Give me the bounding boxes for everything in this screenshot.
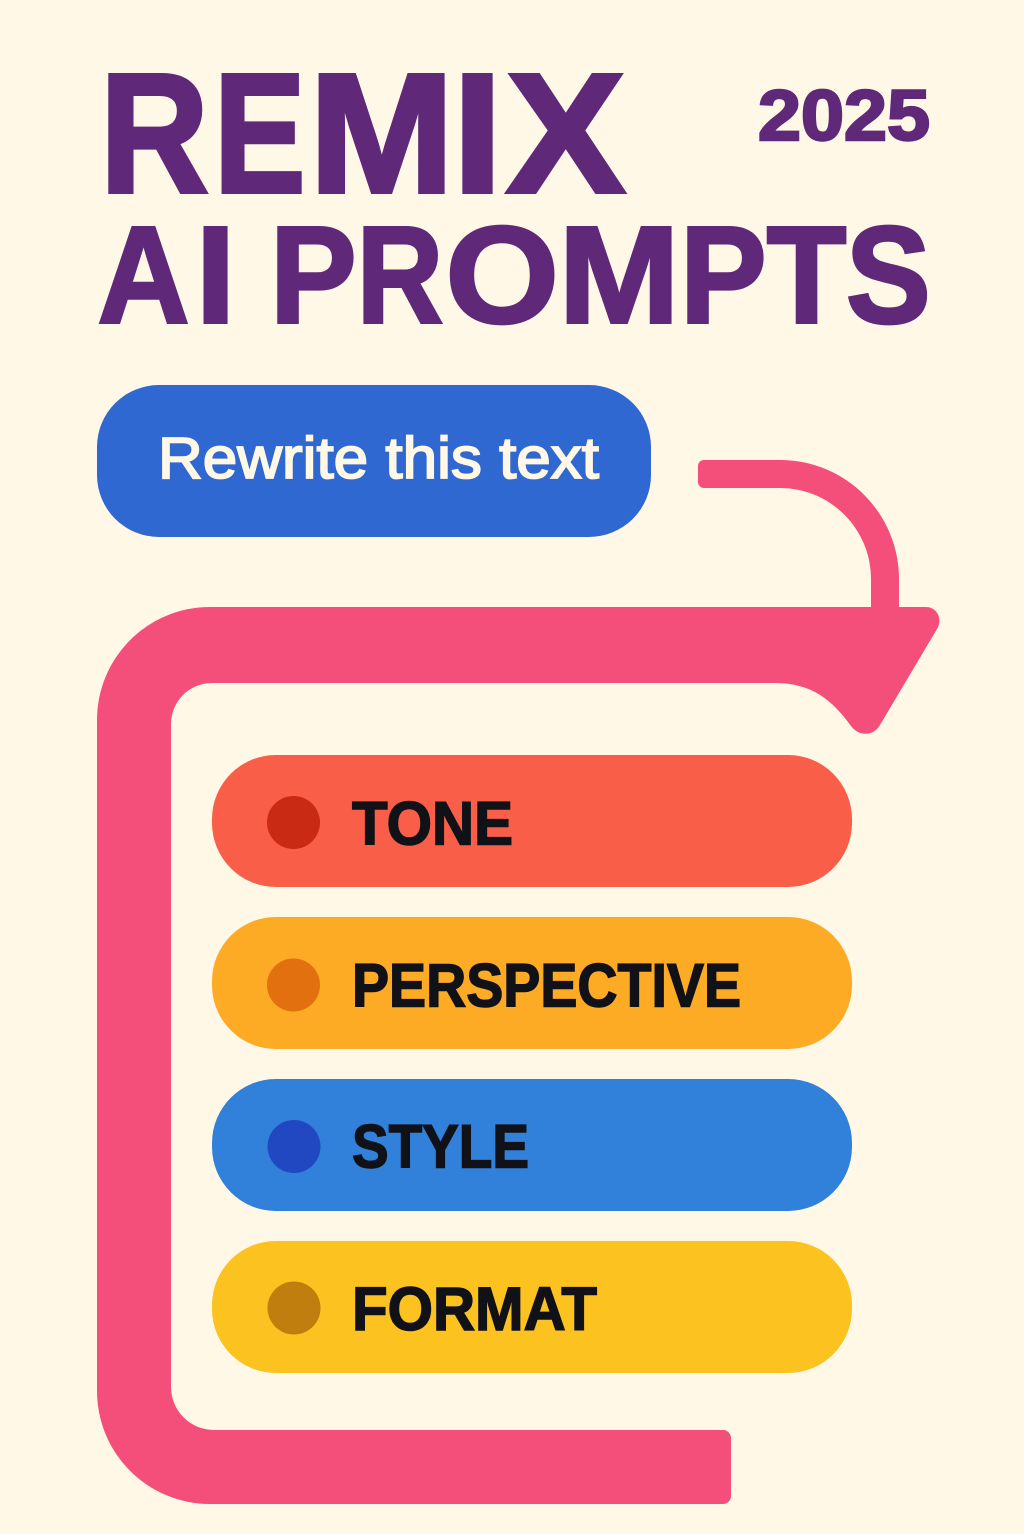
category: perspective xyxy=(212,917,852,1049)
title line: AI PROMPTS: S xyxy=(846,198,931,352)
icon: style dot xyxy=(268,1120,320,1173)
title line: AI PROMPTS: P xyxy=(680,198,767,352)
title line: AI PROMPTS: A xyxy=(98,198,190,352)
label: format: FORMAT xyxy=(352,1275,597,1343)
title line: REMIX: I xyxy=(452,39,503,229)
title line: AI PROMPTS: M xyxy=(558,198,680,352)
arrow: large loop around categories xyxy=(97,607,939,1504)
arrow: small curved connector xyxy=(698,460,899,615)
title line: REMIX: X xyxy=(506,39,625,229)
prompt text: Rewrite this text xyxy=(158,426,599,491)
icon: tone dot xyxy=(267,796,320,849)
label: style: STYLE xyxy=(352,1112,529,1180)
title line: AI PROMPTS: O xyxy=(445,198,559,352)
title line: AI PROMPTS: T xyxy=(767,198,846,352)
title line: REMIX: R xyxy=(100,39,209,229)
label: perspective: PERSPECTIVE xyxy=(352,952,741,1020)
title line: AI PROMPTS: R xyxy=(357,198,443,352)
icon: format dot xyxy=(268,1282,320,1334)
title line: AI PROMPTS: P xyxy=(270,198,357,352)
title line: AI PROMPTS: I xyxy=(195,198,236,352)
prompt pill xyxy=(97,385,651,537)
year: 2025 xyxy=(758,77,930,156)
icon: perspective dot xyxy=(267,958,320,1012)
title line: REMIX: E xyxy=(214,39,305,229)
category: tone xyxy=(212,755,852,887)
label: tone: TONE xyxy=(352,790,513,858)
category: format xyxy=(212,1241,852,1373)
category: style xyxy=(212,1079,852,1211)
title xyxy=(98,39,931,352)
title line: REMIX: M xyxy=(309,39,454,229)
